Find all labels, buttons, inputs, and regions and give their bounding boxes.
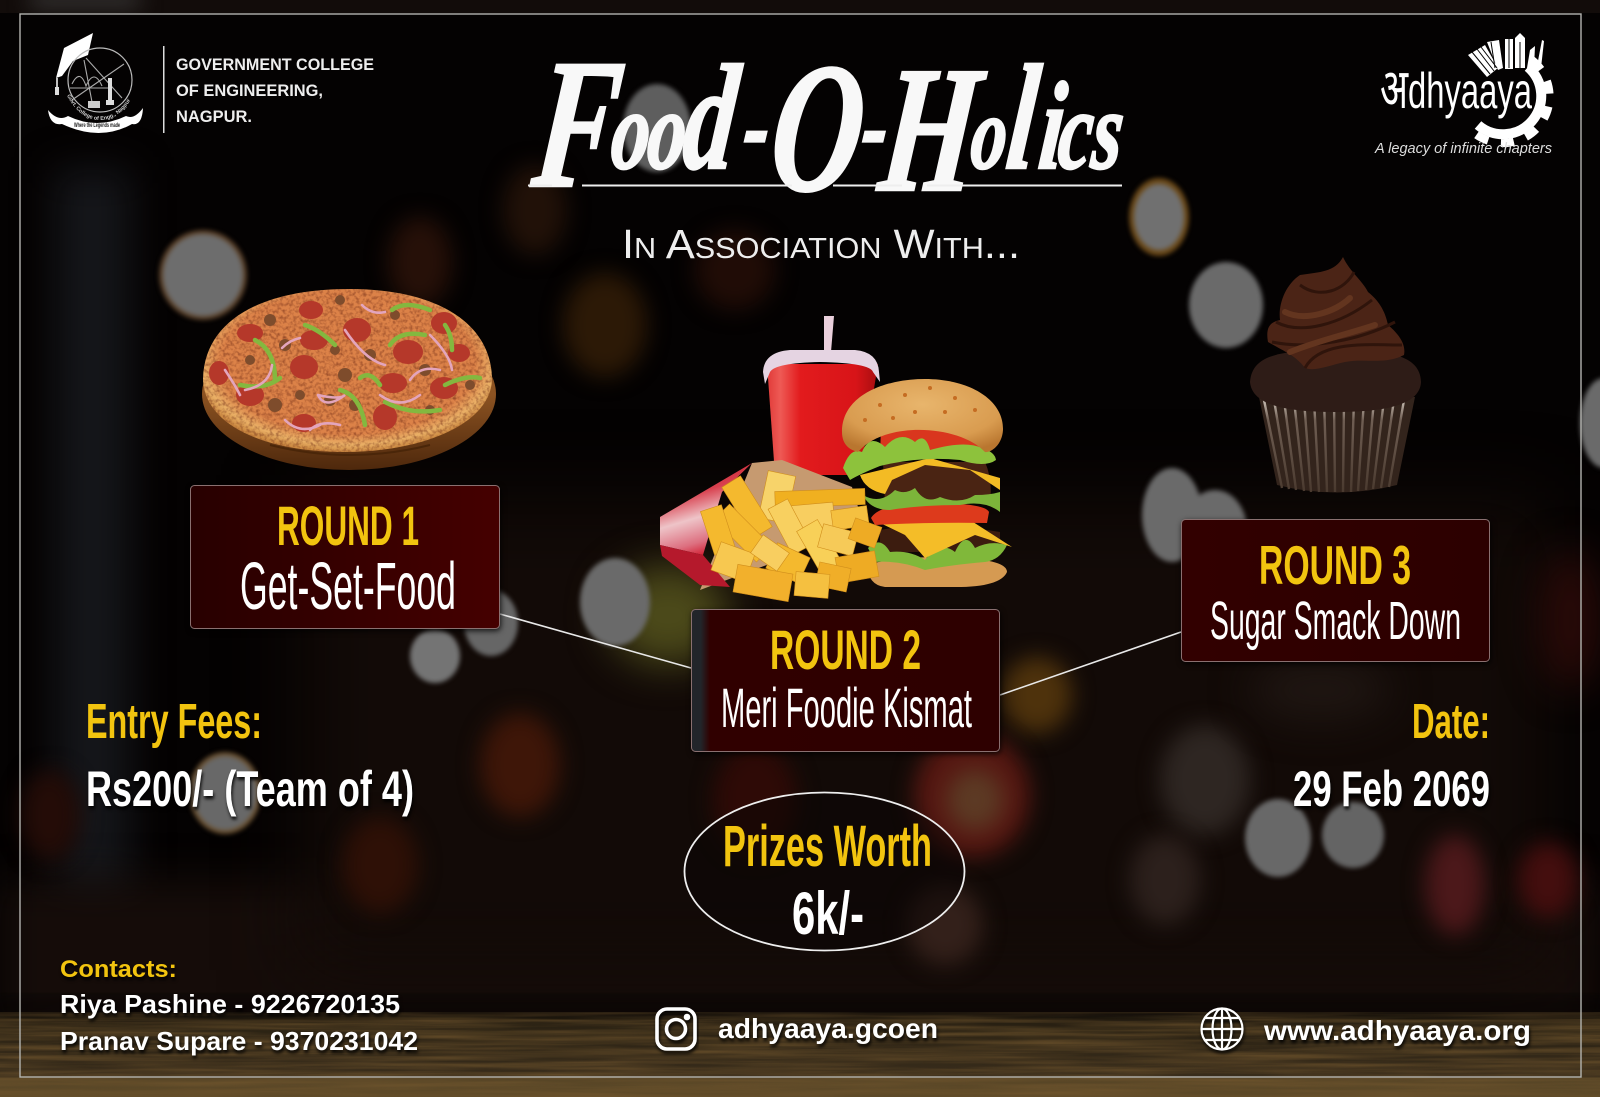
panel: round 1 xyxy=(190,486,500,628)
college crest logo: Govt. College of Engg., Nagpur xyxy=(68,94,130,120)
crest divider xyxy=(163,46,164,133)
instagram handle: adhyaaya.gcoen xyxy=(718,1013,938,1044)
college crest logo xyxy=(48,33,143,133)
round 3 label: ROUND 3 xyxy=(1259,534,1411,596)
prizes ellipse xyxy=(684,792,964,950)
round 1 label: ROUND 1 xyxy=(277,494,419,557)
title: o xyxy=(966,76,1014,191)
frosting swirl xyxy=(1267,257,1404,369)
title: o xyxy=(606,68,658,192)
title: s xyxy=(1086,68,1130,192)
fries carton xyxy=(660,460,882,602)
adhyaaya logo xyxy=(1374,33,1552,157)
bokeh lights xyxy=(159,84,1600,877)
title underline xyxy=(528,184,1122,186)
subtitle: In Association With... xyxy=(622,221,1020,267)
title: i xyxy=(1034,57,1072,196)
round 2 name: Meri Foodie Kismat xyxy=(721,676,972,739)
crest banner xyxy=(48,108,143,133)
contacts: Riya Pashine - 9226720135 xyxy=(60,989,400,1019)
illustration: drink, burger and fries xyxy=(660,316,1012,602)
icon: instagram xyxy=(657,1009,695,1049)
title: H xyxy=(871,30,992,230)
title: O xyxy=(762,27,874,231)
panel: round 3 xyxy=(1182,520,1490,662)
college name xyxy=(176,56,374,126)
title: l xyxy=(1001,34,1047,201)
burger xyxy=(842,379,1012,587)
skyline xyxy=(1468,33,1544,77)
contacts: Contacts: xyxy=(60,956,177,983)
entry fees: Rs200/- (Team of 4) xyxy=(86,761,414,817)
round 2 label: ROUND 2 xyxy=(770,618,921,681)
connector lines xyxy=(500,614,1181,695)
college name: OF ENGINEERING, xyxy=(176,82,323,100)
website: www.adhyaaya.org xyxy=(1263,1015,1531,1046)
illustration: cupcake xyxy=(1250,257,1421,492)
title: c xyxy=(1053,68,1100,192)
title: d xyxy=(677,34,747,201)
college name: GOVERNMENT COLLEGE xyxy=(176,56,374,74)
title: - xyxy=(856,63,895,187)
college crest logo: Where the Legends made xyxy=(74,123,120,129)
cupcake sponge xyxy=(1250,350,1421,412)
college name: NAGPUR. xyxy=(176,108,252,126)
entry fees xyxy=(86,695,414,817)
contacts xyxy=(60,956,418,1056)
graduation cap xyxy=(56,33,93,78)
round 1 name: Get-Set-Food xyxy=(240,549,456,624)
date: 29 Feb 2069 xyxy=(1293,761,1490,817)
panel: round 2 xyxy=(692,610,1000,752)
adhyaaya logo: अdhyaaya xyxy=(1380,57,1532,120)
date: Date: xyxy=(1412,695,1490,749)
straw xyxy=(824,316,834,352)
fries xyxy=(700,471,882,602)
title xyxy=(525,23,1135,231)
date xyxy=(1293,695,1490,817)
drink cup xyxy=(767,364,878,475)
gear xyxy=(1478,67,1541,134)
illustration: pizza xyxy=(202,289,496,470)
title: o xyxy=(642,68,694,192)
contacts: Pranav Supare - 9370231042 xyxy=(60,1026,418,1056)
prizes ellipse: 6k/- xyxy=(792,880,864,947)
title: - xyxy=(738,63,777,187)
entry fees: Entry Fees: xyxy=(86,695,262,749)
icon: globe xyxy=(1202,1008,1243,1050)
tagline: A legacy of infinite chapters xyxy=(1374,140,1552,157)
prizes ellipse: Prizes Worth xyxy=(723,814,932,879)
title: F xyxy=(525,23,631,227)
cupcake wrapper xyxy=(1259,397,1415,492)
